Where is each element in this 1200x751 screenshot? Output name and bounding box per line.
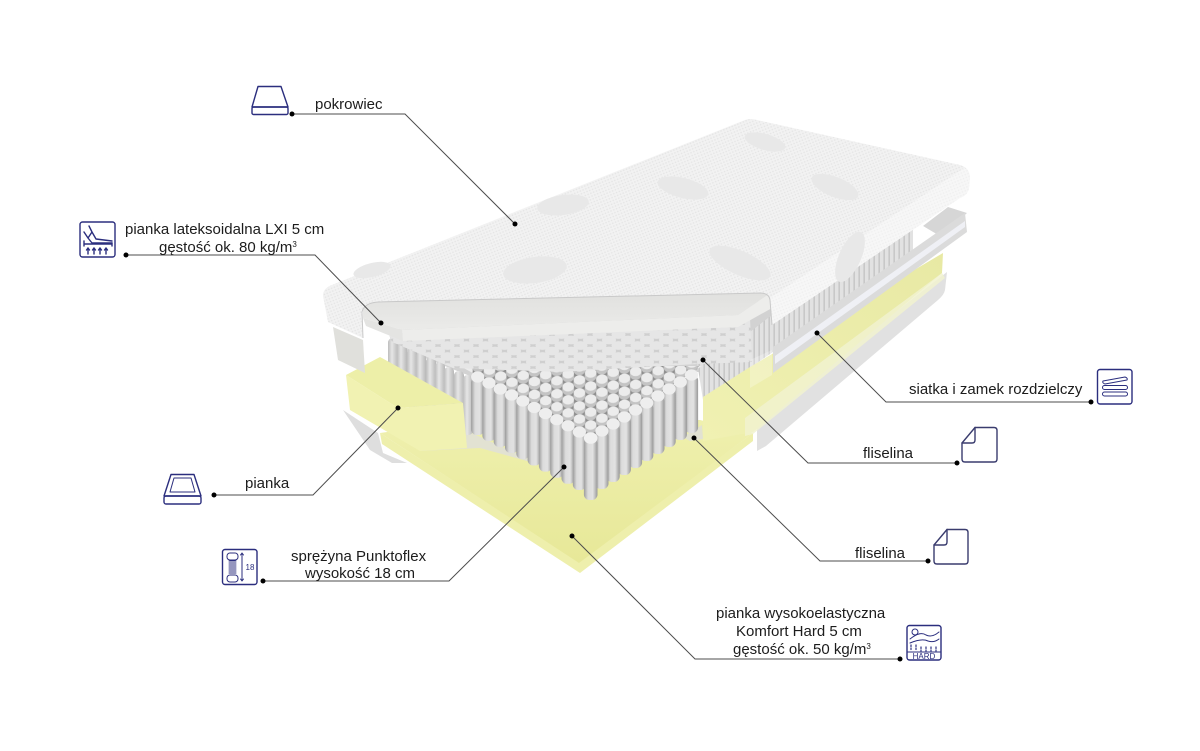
leader: pianka lateksoidalna — [124, 252, 384, 326]
fleece sheet under springs — [420, 425, 703, 466]
translucent mesh corner — [750, 350, 772, 388]
icon: fleece lower — [934, 530, 968, 564]
label: pianka: pianka — [245, 475, 290, 492]
label: sprezyna Punktoflex: sprężyna Punktoflex — [291, 548, 427, 565]
fleece over spring tops — [388, 318, 752, 372]
mesh and zipper strip right — [773, 213, 967, 373]
leader: sprezyna — [260, 464, 566, 584]
label: pianka wysokoelastyczna: 3 — [866, 642, 871, 651]
icon: latex foam — [80, 222, 115, 257]
block front face — [346, 375, 467, 451]
left foam block — [346, 357, 467, 451]
label: HARD icon text: HARD — [913, 652, 936, 661]
label: pokrowiec: pokrowiec — [315, 96, 383, 113]
label: pianka lateksoidalna: gęstość ok. 80 kg/m — [159, 239, 292, 256]
leader: pokrowiec — [290, 112, 518, 226]
icon: foam frame — [164, 474, 201, 504]
label: spring icon number: 18 — [246, 563, 255, 572]
springs under cover on right side — [697, 228, 913, 400]
icon: spring height — [222, 550, 257, 584]
icon: fleece upper — [962, 428, 997, 462]
leader: pianka — [212, 406, 400, 498]
rear springs left side — [388, 338, 473, 435]
mattress illustration — [323, 119, 970, 573]
quilted cover patches — [352, 129, 871, 287]
front spring columns — [471, 369, 698, 500]
top cover — [323, 119, 970, 338]
leader: pianka wysokoelastyczna — [570, 534, 902, 662]
cover inner fold edge — [362, 293, 772, 338]
right foam block — [703, 253, 943, 441]
leader: fliselina lower — [692, 436, 930, 564]
cover side face highlight — [770, 168, 970, 325]
label: pianka wysokoelastyczna: gęstość ok. 50 kg/m — [733, 641, 866, 658]
backing behind springs under slab — [388, 300, 772, 376]
label: pianka lateksoidalna: pianka lateksoidalna LXI 5 cm — [125, 221, 324, 238]
label: pianka wysokoelastyczna — [716, 605, 886, 658]
leader: fliselina upper — [700, 358, 960, 466]
icon: mesh layers — [1098, 370, 1132, 404]
rear mesh band and gap — [913, 207, 967, 245]
pale band over foam — [745, 273, 945, 436]
icon: cover — [252, 86, 288, 114]
label: fliselina upper: fliselina — [863, 445, 914, 462]
label: pianka wysokoelastyczna: Komfort Hard 5 cm — [736, 623, 862, 640]
bottom foam layer — [380, 420, 753, 573]
label: siatka i zamek: siatka i zamek rozdzielczy — [909, 381, 1083, 398]
foam side faces — [380, 433, 753, 573]
label: sprezyna Punktoflex — [291, 548, 427, 582]
label: pianka lateksoidalna: 3 — [292, 240, 297, 249]
block top face — [346, 357, 463, 408]
latex foam slab — [363, 288, 772, 341]
bottom cover: right side — [757, 272, 947, 451]
label: sprezyna Punktoflex: wysokość 18 cm — [304, 565, 415, 582]
mesh fragment left — [333, 327, 365, 373]
label: pianka lateksoidalna — [125, 221, 324, 256]
icon: hard foam — [907, 626, 941, 660]
label: fliselina lower: fliselina — [855, 545, 906, 562]
front spring tops — [460, 366, 702, 438]
label: pianka wysokoelastyczna: pianka wysokoelastyczna — [716, 605, 886, 622]
bottom cover: left fragment — [343, 410, 407, 463]
leader: siatka — [814, 330, 1094, 404]
foam top face — [380, 420, 753, 563]
